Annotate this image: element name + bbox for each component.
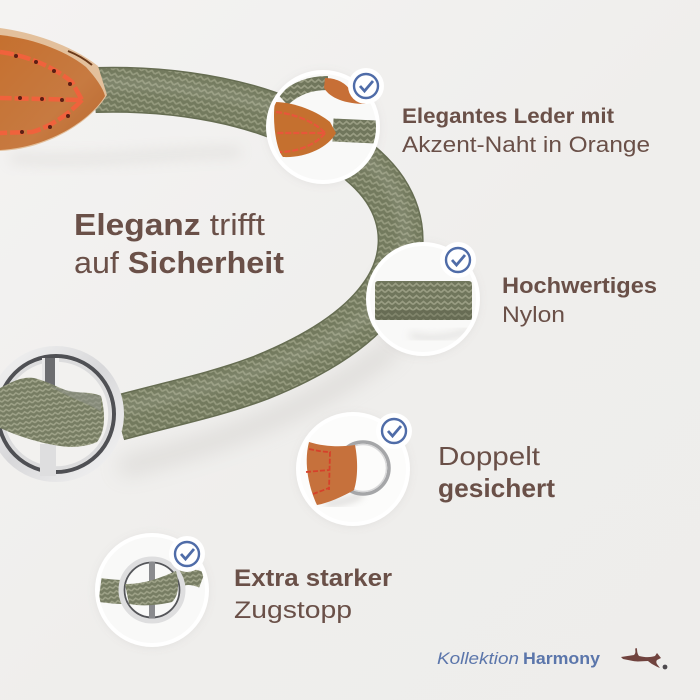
icon: check badge double secured: [376, 413, 412, 449]
brand line: [437, 649, 601, 668]
icon: running dog logo: [621, 648, 667, 669]
title: [74, 207, 284, 280]
silver ring with rope: [0, 350, 120, 478]
label: nylon: [502, 273, 657, 327]
icon: check badge leather: [348, 68, 384, 104]
callout: nylon detail: [366, 242, 480, 356]
label: leather: [402, 105, 650, 157]
label: nylon: Nylon: [502, 302, 565, 327]
label: nylon: Hochwertiges: [502, 273, 657, 298]
callout: pull stop: [95, 533, 209, 647]
icon: check badge pull stop: [169, 536, 205, 572]
title: auf Sicherheit: [74, 245, 284, 280]
callout: leather detail: [266, 70, 380, 184]
callout: double secured: [296, 412, 410, 526]
label: pull stop: Extra starker: [234, 565, 392, 592]
label: leather: Akzent-Naht in Orange: [402, 132, 650, 157]
label: double secured: Doppelt: [438, 441, 541, 471]
label: pull stop: Zugstopp: [234, 597, 352, 624]
collar photo: [0, 28, 405, 478]
brand line: Harmony: [523, 649, 601, 668]
icon: check badge nylon: [440, 242, 476, 278]
label: pull stop: [234, 565, 392, 624]
label: leather: Elegantes Leder mit: [402, 105, 614, 128]
title: Eleganz trifft: [74, 207, 265, 242]
label: double secured: [438, 441, 555, 503]
brand line: Kollektion: [437, 649, 519, 668]
leather tab: [0, 28, 107, 151]
label: double secured: gesichert: [438, 473, 555, 503]
